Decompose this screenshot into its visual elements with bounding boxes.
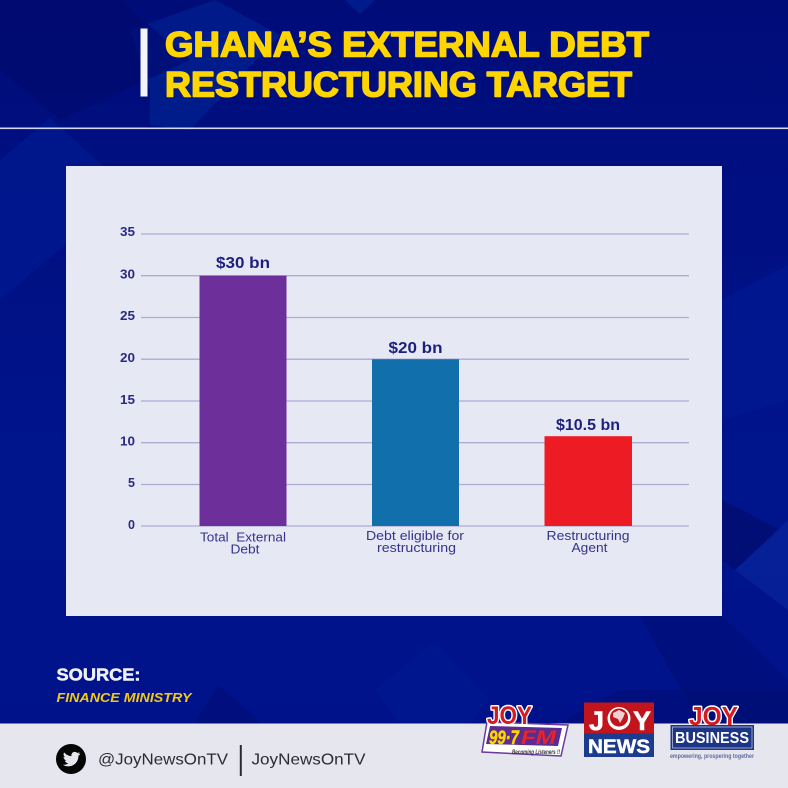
logo: joy 99.7 fm: Becoming Listeners !! bbox=[512, 749, 561, 756]
logo: joy 99.7 fm bbox=[482, 702, 568, 756]
social handles: @JoyNewsOnTV bbox=[98, 752, 228, 768]
bar: debt eligible bbox=[372, 359, 459, 526]
category labels: Agent bbox=[572, 540, 608, 555]
icon: twitter bbox=[56, 744, 86, 774]
title: RESTRUCTURING TARGET bbox=[165, 64, 632, 104]
category labels: Restructuring bbox=[546, 528, 630, 543]
logo: joy 99.7 fm: JOY bbox=[487, 702, 532, 730]
bar: restructuring agent bbox=[544, 436, 632, 526]
bar value labels: $20 bn bbox=[388, 340, 442, 357]
gridlines bbox=[141, 234, 689, 526]
panel: chart bbox=[66, 166, 722, 616]
title: GHANA’S EXTERNAL DEBT bbox=[165, 24, 649, 64]
bar value labels: $30 bn bbox=[216, 255, 270, 272]
logo: joy business bbox=[670, 701, 754, 760]
bar value labels bbox=[216, 255, 620, 434]
logo: joy news: Y bbox=[633, 706, 651, 736]
y axis labels: 5 bbox=[128, 476, 135, 490]
y axis labels: 25 bbox=[120, 309, 135, 323]
header divider bbox=[0, 128, 788, 129]
category labels: Debt eligible for bbox=[366, 528, 465, 543]
logo: joy 99.7 fm: FM bbox=[521, 728, 557, 749]
footer bar bbox=[0, 724, 788, 788]
y axis labels: 10 bbox=[120, 434, 135, 448]
social handles: JoyNewsOnTV bbox=[252, 752, 366, 768]
source: SOURCE: bbox=[56, 664, 140, 684]
logo: joy 99.7 fm: 99·7 bbox=[489, 728, 520, 749]
category labels: restructuring bbox=[377, 540, 456, 555]
logo: joy news: J bbox=[589, 706, 604, 736]
logo: joy business: empowering, prospering together bbox=[670, 753, 754, 760]
source bbox=[56, 664, 193, 705]
category labels bbox=[200, 528, 630, 556]
logo: joy business: JOY bbox=[689, 701, 738, 731]
y axis labels: 20 bbox=[120, 351, 135, 365]
category labels: Debt bbox=[230, 542, 260, 556]
logo: joy news: NEWS bbox=[588, 736, 650, 758]
title bbox=[165, 24, 649, 104]
logo: joy business: BUSINESS bbox=[675, 730, 749, 747]
source: FINANCE MINISTRY bbox=[56, 690, 193, 705]
bar: total external debt bbox=[200, 276, 286, 526]
title accent bar bbox=[140, 28, 148, 96]
y axis labels: 30 bbox=[120, 268, 135, 282]
logo: joy news bbox=[584, 702, 654, 758]
social handles bbox=[98, 745, 366, 776]
category labels: Total External bbox=[200, 530, 286, 544]
bar value labels: $10.5 bn bbox=[556, 417, 620, 434]
y axis labels: 35 bbox=[120, 225, 135, 239]
y axis labels bbox=[120, 225, 135, 532]
y axis labels: 0 bbox=[128, 518, 135, 532]
y axis labels: 15 bbox=[120, 393, 135, 407]
